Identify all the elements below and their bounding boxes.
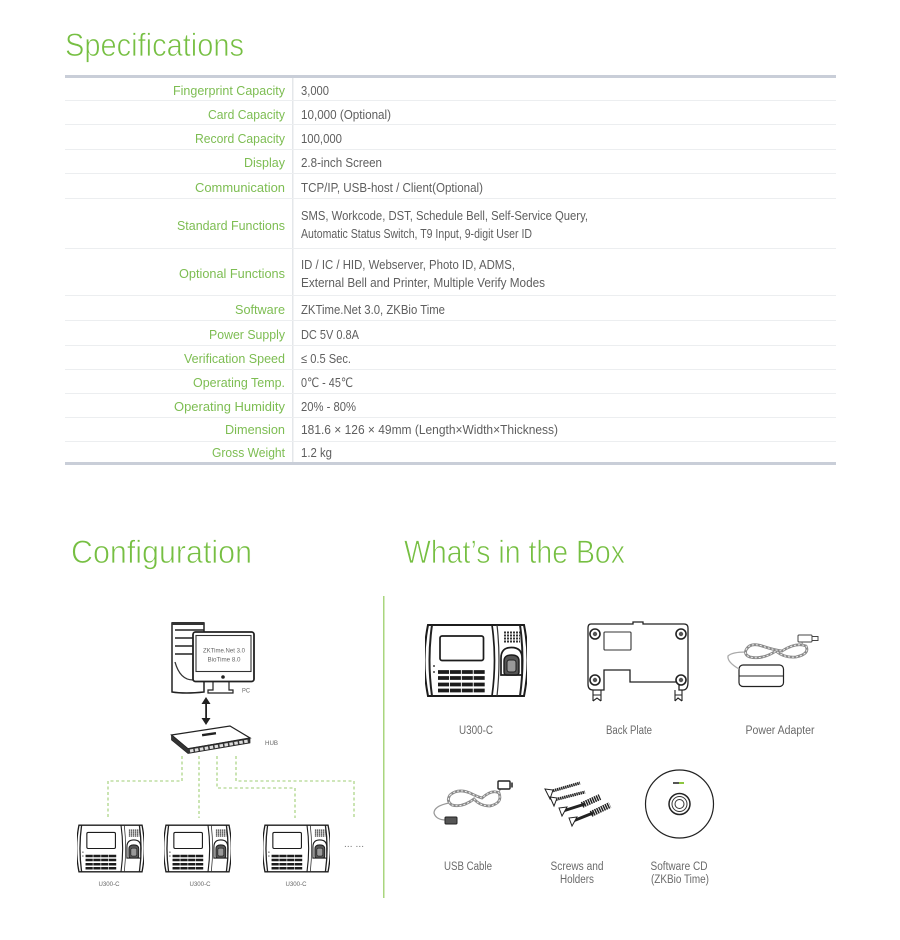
- panel: box contents: [424, 622, 818, 886]
- device: U300-C 2: [164, 825, 231, 888]
- item: USB Cable: [434, 781, 513, 873]
- row values: 10,000 (Optional): [301, 107, 391, 122]
- row labels: Operating Humidity: [174, 399, 285, 414]
- arrow: PC to hub: [202, 697, 210, 725]
- connection lines: hub to devices: [108, 756, 354, 818]
- title: Specifications: Specifications: [65, 27, 244, 63]
- vertical divider between panels: [383, 596, 384, 898]
- row values: External Bell and Printer, Multiple Verify Modes: [301, 275, 545, 290]
- row labels: Power Supply: [209, 327, 285, 342]
- row values: ID / IC / HID, Webserver, Photo ID, ADMS,: [301, 257, 515, 272]
- row labels: Operating Temp.: [193, 375, 285, 390]
- row labels: Standard Functions: [177, 218, 285, 233]
- row values: 2.8-inch Screen: [301, 155, 382, 170]
- item: Software CD: Software CD: [650, 861, 708, 873]
- specifications table: [65, 75, 836, 465]
- row labels: Gross Weight: [212, 445, 285, 460]
- row values: 1.2 kg: [301, 445, 332, 460]
- item: U300-C: U300-C: [459, 725, 493, 737]
- item: Power Adapter: Power Adapter: [746, 725, 815, 737]
- row labels: Communication: [195, 180, 285, 195]
- item: Screws and Holders: [545, 783, 610, 886]
- icon: PC tower and monitor: BioTime 8.0: [208, 656, 241, 664]
- row values: TCP/IP, USB-host / Client(Optional): [301, 180, 483, 195]
- device: U300-C 3: U300-C: [286, 881, 307, 888]
- icon: network hub: [172, 726, 278, 754]
- device: U300-C 1: U300-C: [98, 881, 120, 888]
- row values: Automatic Status Switch, T9 Input, 9-digit User ID: [301, 226, 532, 241]
- device: U300-C 3: [263, 825, 330, 888]
- row values: ZKTime.Net 3.0, ZKBio Time: [301, 302, 445, 317]
- row labels: Fingerprint Capacity: [173, 83, 285, 98]
- row values: SMS, Workcode, DST, Schedule Bell, Self-Service Query,: [301, 208, 588, 223]
- item: U300-C: [424, 625, 528, 737]
- row labels: Record Capacity: [195, 131, 285, 146]
- icon: PC tower and monitor: PC: [242, 688, 250, 694]
- item: Software CD: [646, 770, 714, 886]
- item: Screws and Holders: Screws and: [550, 861, 604, 873]
- item: Screws and Holders: Holders: [560, 874, 594, 886]
- title: Configuration: Configuration: [71, 534, 252, 570]
- item: Back Plate: Back Plate: [606, 725, 652, 737]
- row values: 181.6 × 126 × 49mm (Length×Width×Thickness): [301, 422, 558, 437]
- item: Software CD: (ZKBio Time): [651, 874, 709, 886]
- ellipsis: more devices: ... ...: [344, 839, 364, 850]
- row labels: Dimension: [225, 422, 285, 437]
- row values: 0℃ - 45℃: [301, 375, 353, 390]
- row values: ≤ 0.5 Sec.: [301, 351, 351, 366]
- device: U300-C 2: U300-C: [190, 881, 211, 888]
- row values: [301, 83, 588, 460]
- title: What's in the Box: What’s in the Box: [404, 534, 625, 570]
- row labels: [173, 83, 285, 460]
- icon: PC tower and monitor: ZKTime.Net 3.0: [203, 648, 245, 654]
- row labels: Software: [235, 302, 285, 317]
- item: Power Adapter: [728, 635, 818, 737]
- row labels: Verification Speed: [184, 351, 285, 366]
- row labels: Display: [244, 155, 285, 170]
- row labels: Optional Functions: [179, 266, 285, 281]
- row values: 20% - 80%: [301, 399, 356, 414]
- icon: network hub: HUB: [265, 740, 278, 747]
- icon: PC tower and monitor: [172, 622, 254, 694]
- row values: 100,000: [301, 131, 342, 146]
- item: Back Plate: [588, 622, 688, 737]
- row labels: Card Capacity: [208, 107, 285, 122]
- row values: 3,000: [301, 83, 329, 98]
- panel: network configuration diagram: [77, 622, 364, 888]
- item: USB Cable: USB Cable: [444, 861, 492, 873]
- row values: DC 5V 0.8A: [301, 327, 359, 342]
- device: U300-C 1: [77, 825, 144, 888]
